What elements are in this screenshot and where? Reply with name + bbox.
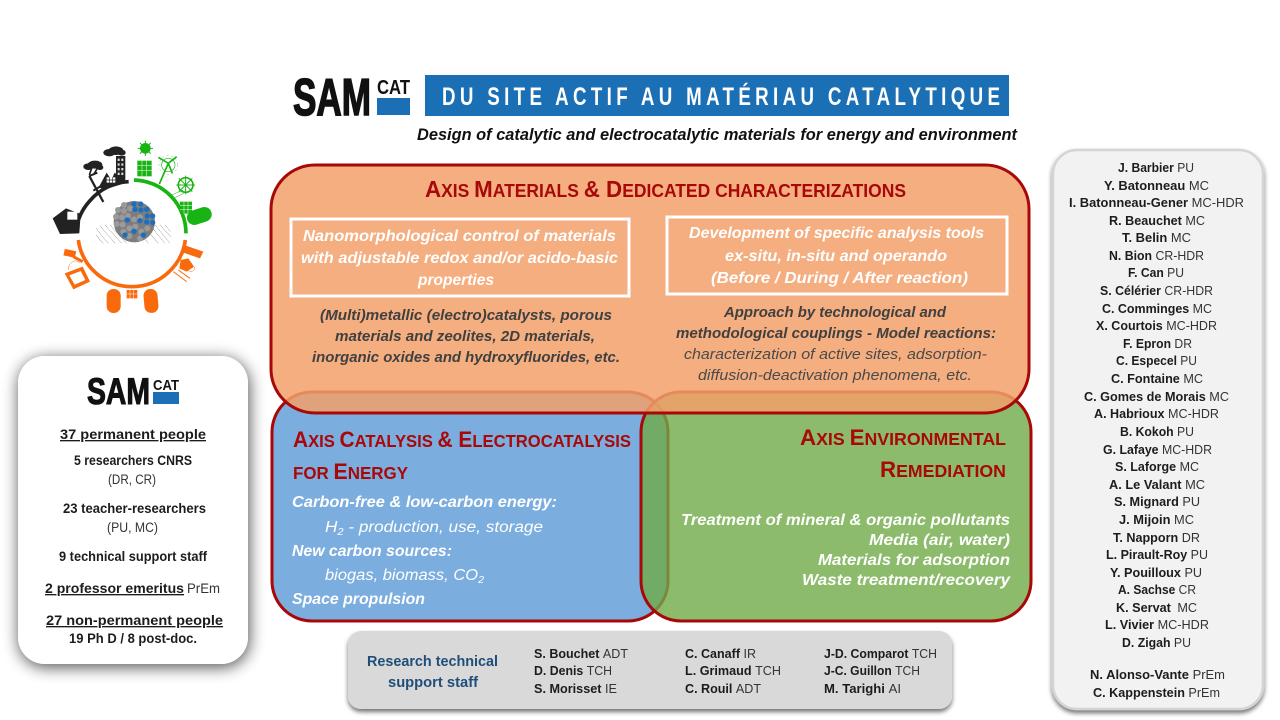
staff counts: 2 professor emeritus	[45, 581, 184, 596]
list: names: K. Servat MC	[1116, 600, 1197, 615]
icon: green arc renewable energy	[134, 141, 214, 233]
text: catalysis topics: Space propulsion	[292, 591, 425, 608]
list: names: B. Kokoh PU	[1120, 424, 1194, 439]
text: materials list	[312, 308, 620, 366]
text: approach: Approach by technological and	[723, 305, 947, 321]
panel: axis catalysis and electrocatalysis	[272, 392, 668, 621]
heading: axis environmental: REMEDIATION	[880, 457, 1006, 482]
list: names: Y. Batonneau MC	[1104, 178, 1209, 193]
text: materials list: inorganic oxides and hydroxyfluorides, etc.	[312, 350, 620, 366]
staff counts: 27 non-permanent people	[46, 613, 224, 628]
text: catalysis topics: Carbon-free & low-carbon energy:	[292, 494, 557, 511]
list: names: D. Zigah PU	[1122, 635, 1191, 650]
text: catalysis topics	[292, 494, 557, 608]
list: staff names: C. Canaff IR	[685, 646, 756, 661]
list: staff names: J-D. Comparot TCH	[824, 646, 937, 661]
list: names: A. Habrioux MC-HDR	[1094, 406, 1219, 421]
list: names: Y. Pouilloux PU	[1110, 565, 1202, 580]
staff counts: PrEm	[187, 581, 220, 596]
list: names: I. Batonneau-Gener MC-HDR	[1069, 195, 1244, 210]
list: names: J. Mijoin MC	[1119, 512, 1194, 527]
list: names: N. Alonso-Vante PrEm	[1090, 667, 1225, 682]
list: names: S. Mignard PU	[1114, 494, 1200, 509]
list: names: S. Célérier CR-HDR	[1100, 283, 1213, 298]
box: nanomorphological control	[291, 219, 629, 296]
panel: axis environmental remediation	[641, 392, 1031, 621]
list: names: R. Beauchet MC	[1109, 213, 1205, 228]
icon: surface hatch	[96, 225, 171, 243]
header banner	[425, 75, 1009, 116]
text: materials list: (Multi)metallic (electro)catalysts, porous	[320, 308, 612, 324]
list: names	[1069, 160, 1244, 700]
list: names: A. Sachse CR	[1118, 582, 1196, 597]
staff counts: 19 Ph D / 8 post-doc.	[69, 631, 197, 646]
header logo: SAM	[293, 69, 371, 127]
text: remediation topics: Materials for adsorption	[818, 552, 1010, 569]
list: staff names: S. Morisset IE	[534, 681, 617, 696]
icon: nanoparticle	[113, 201, 155, 242]
panel: axis materials	[271, 165, 1029, 413]
list: names: N. Bion CR-HDR	[1109, 248, 1204, 263]
text: remediation topics	[681, 512, 1012, 589]
header banner: DU SITE ACTIF AU MATÉRIAU CATALYTIQUE	[442, 82, 1000, 111]
list: names: A. Le Valant MC	[1109, 477, 1205, 492]
text: catalysis topics: H	[325, 519, 336, 536]
text: approach: methodological couplings - Model reactions:	[676, 326, 996, 342]
list: names: C. Comminges MC	[1102, 301, 1212, 316]
box: analysis tools: (Before / During / After reaction)	[711, 270, 968, 287]
text: catalysis topics: 2	[477, 575, 484, 586]
list: names: C. Gomes de Morais MC	[1084, 389, 1229, 404]
list: names: F. Epron DR	[1123, 336, 1192, 351]
heading: support staff	[367, 654, 498, 691]
list: staff names: L. Grimaud TCH	[685, 663, 781, 678]
text: catalysis topics: biogas, biomass, CO	[325, 567, 469, 584]
text: catalysis topics: New carbon sources:	[292, 543, 452, 560]
staff counts: 9 technical support staff	[59, 549, 207, 564]
text: remediation topics: Treatment of mineral & organic pollutants	[681, 512, 1010, 529]
heading: axis catalysis: AXIS CATALYSIS & ELECTROCATALYSIS	[293, 427, 631, 452]
list: names: C. Fontaine MC	[1111, 371, 1203, 386]
box: nanomorphological control: with adjustable redox and/or acido-basic	[301, 250, 618, 267]
box: analysis tools	[667, 217, 1007, 294]
staff counts: 23 teacher-researchers	[63, 501, 206, 516]
list: staff names: C. Rouil ADT	[685, 681, 761, 696]
text: approach: diffusion-deactivation phenomena, etc.	[698, 368, 972, 384]
heading: axis materials: AXIS MATERIALS & DEDICATED CHARACTERIZATIONS	[425, 176, 906, 202]
list: names: S. Laforge MC	[1115, 459, 1199, 474]
heading: support staff: support staff	[388, 675, 478, 691]
heading: axis catalysis	[293, 427, 631, 484]
text: catalysis topics: - production, use, storage	[344, 519, 543, 536]
panel: research technical support staff	[348, 631, 952, 709]
box: analysis tools: Development of specific analysis tools	[689, 225, 984, 242]
text: remediation topics: Media (air, water)	[869, 532, 1010, 549]
icon: energy and environment circle	[53, 141, 214, 313]
list: staff names: J-C. Guillon TCH	[824, 663, 920, 678]
icon: black arc fossil energy	[53, 146, 129, 234]
panel: permanent staff summary	[18, 356, 248, 664]
list: names: G. Lafaye MC-HDR	[1103, 442, 1212, 457]
list: names: C. Kappenstein PrEm	[1093, 685, 1220, 700]
list: staff names: S. Bouchet ADT	[534, 646, 628, 661]
text: approach: characterization of active sites, adsorption-	[684, 347, 987, 363]
box: analysis tools: ex-situ, in-situ and operando	[725, 248, 947, 265]
list: names: C. Especel PU	[1116, 353, 1197, 368]
heading: axis environmental: AXIS ENVIRONMENTAL	[800, 425, 1006, 450]
text: remediation topics: Waste treatment/recovery	[802, 572, 1012, 589]
logo small: SAM	[87, 371, 150, 412]
text: materials list: materials and zeolites, 2D materials,	[335, 329, 595, 345]
list: names: T. Napporn DR	[1113, 530, 1200, 545]
heading: axis catalysis: FOR ENERGY	[293, 459, 408, 484]
box: nanomorphological control: properties	[417, 272, 494, 289]
logo small: CAT	[153, 377, 179, 394]
panel: researchers list	[1053, 150, 1263, 709]
list: names: L. Pirault-Roy PU	[1106, 547, 1208, 562]
list: names: L. Vivier MC-HDR	[1105, 617, 1209, 632]
list: staff names: M. Tarighi AI	[824, 681, 901, 696]
list: names: J. Barbier PU	[1118, 160, 1194, 175]
header logo: CAT	[377, 77, 410, 99]
heading: support staff: Research technical	[367, 654, 498, 670]
staff counts	[45, 427, 224, 646]
text: approach	[676, 305, 996, 384]
list: staff names	[534, 646, 937, 696]
list: names: T. Belin MC	[1122, 230, 1191, 245]
staff counts: (PU, MC)	[107, 520, 158, 535]
staff counts: (DR, CR)	[108, 472, 156, 487]
tagline: Design of catalytic and electrocatalytic materials for energy and environment	[417, 126, 1018, 144]
list: names: X. Courtois MC-HDR	[1096, 318, 1217, 333]
list: staff names: D. Denis TCH	[534, 663, 612, 678]
staff counts: 5 researchers CNRS	[74, 453, 192, 468]
text: catalysis topics: 2	[336, 527, 344, 538]
list: names: F. Can PU	[1128, 265, 1184, 280]
staff counts: 37 permanent people	[60, 427, 207, 442]
icon: orange arc applications	[63, 240, 203, 313]
box: nanomorphological control: Nanomorphological control of materials	[303, 228, 616, 245]
heading: axis environmental	[800, 425, 1006, 482]
